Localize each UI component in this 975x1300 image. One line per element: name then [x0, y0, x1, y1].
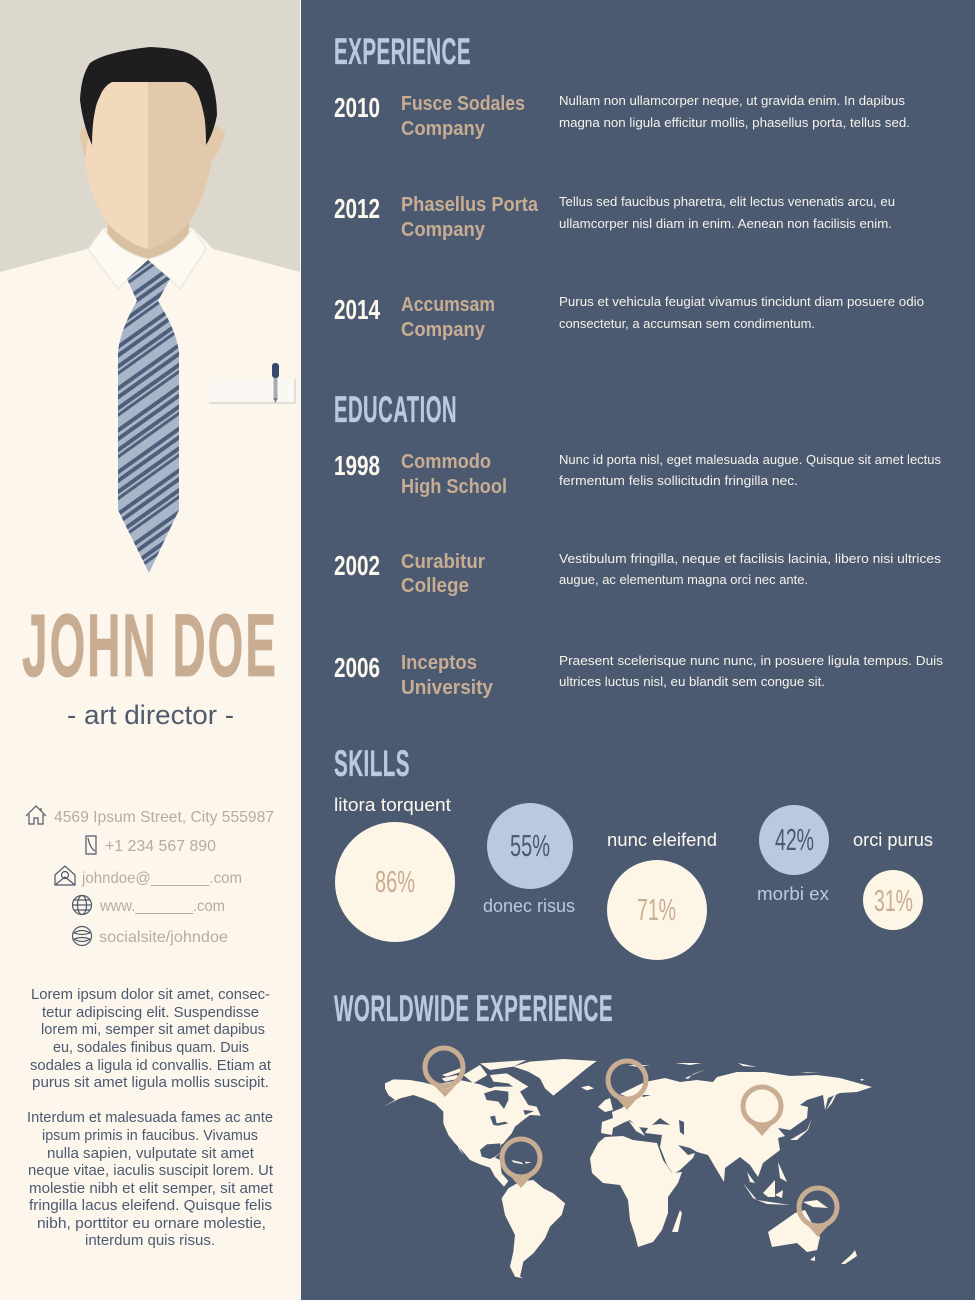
greenland: [513, 1059, 597, 1096]
americas and arctic: [383, 1059, 597, 1278]
panel: profile sidebar: [0, 0, 301, 1300]
ears: [80, 125, 225, 165]
northern islands: [628, 1063, 864, 1081]
skill: nunc eleifend 71%: nunc eleifend: [607, 830, 717, 850]
north america: [383, 1079, 541, 1187]
caribbean islands: [512, 1160, 532, 1164]
skill: morbi ex 42%: [757, 805, 829, 904]
icon: social: [72, 926, 92, 946]
experience entry 2014: [334, 294, 924, 341]
website: www._______.com: [99, 898, 225, 915]
new zealand and tasmania: [810, 1250, 857, 1264]
eurasia: [601, 1072, 872, 1182]
education entry 2002: Vestibulum fringilla, neque et facilisis lacinia, libero nisi ultrices: [559, 551, 942, 566]
experience entry 2010: [334, 92, 910, 140]
pin: caribbean: [502, 1139, 540, 1188]
job title: - art director -: [67, 700, 234, 730]
pin: australia: [799, 1188, 837, 1237]
heading: education: EDUCATION: [334, 389, 457, 430]
name: JOHN DOE: [22, 595, 278, 695]
education entry 2006: ultrices luctus nisl, eu blandit sem congue sit.: [559, 674, 825, 689]
panel: main content background: [301, 0, 975, 1300]
skill: donec risus 55%: 55%: [510, 828, 550, 863]
education entry 2002: augue, ac elementum magna orci nec ante.: [559, 572, 808, 587]
skill: orci purus 31%: orci purus: [853, 830, 933, 850]
bio paragraph two: nibh, porttitor eu ornare molestie,: [37, 1216, 266, 1232]
skill: orci purus 31%: [853, 830, 933, 930]
education entry 2002: College: [401, 575, 469, 597]
experience entry 2012: 2012: [334, 193, 380, 224]
italy: [628, 1120, 645, 1136]
pin: asia: [743, 1087, 781, 1136]
heading: worldwide experience: WORLDWIDE EXPERIENCE: [334, 988, 613, 1029]
experience entry 2012: Company: [401, 219, 486, 241]
education entry 2006: [334, 652, 944, 699]
face right half: [148, 78, 212, 249]
education entry 1998: High School: [401, 476, 507, 498]
bio paragraph one: tetur adipiscing elit. Suspendisse: [42, 1005, 259, 1021]
skill: litora torquent 86%: [334, 795, 455, 942]
black sea and caspian: [652, 1118, 684, 1135]
phone number: +1 234 567 890: [105, 838, 216, 855]
portrait backdrop: [0, 0, 300, 280]
skill: morbi ex 42%: 42%: [775, 822, 814, 857]
icon: envelope: [55, 866, 75, 885]
experience entry 2012: [334, 193, 895, 241]
education entry 1998: [334, 450, 941, 498]
social handle: socialsite/johndoe: [99, 929, 228, 946]
education entry 2006: Praesent scelerisque nunc nunc, in posuere ligula tempus. Duis: [559, 653, 944, 668]
experience entry 2012: Phasellus Porta: [401, 194, 539, 216]
skill: orci purus 31%: 31%: [874, 883, 913, 918]
experience entry 2010: Nullam non ullamcorper neque, ut gravida enim. In dapibus: [559, 93, 905, 108]
japan and sakhalin: [790, 1093, 837, 1140]
bio paragraph two: fringilla lacus eleifend. Quisque felis: [29, 1198, 272, 1214]
arctic islands: [442, 1060, 528, 1092]
email: johndoe@_______.com: [81, 870, 242, 887]
shirt: [0, 228, 300, 300]
experience entry 2012: Tellus sed faucibus pharetra, elit lectus venenatis arcu, eu: [559, 194, 895, 209]
map pins: [425, 1048, 837, 1237]
madagascar: [672, 1210, 682, 1232]
experience entry 2014: consectetur, a accumsan sem condimentum.: [559, 316, 815, 331]
education entry 2006: 2006: [334, 652, 380, 683]
africa: [590, 1136, 682, 1247]
iceland: [581, 1086, 594, 1090]
bio paragraph one: sodales a ligula id convallis. Etiam at: [30, 1058, 271, 1074]
uk and ireland: [598, 1098, 613, 1112]
face left half: [85, 78, 148, 249]
skill: donec risus 55%: [483, 803, 575, 916]
skill: nunc eleifend 71%: [607, 830, 717, 960]
icon: phone: [86, 836, 96, 854]
bio paragraph one: eu, sodales finibus quam. Duis: [53, 1040, 249, 1056]
bio paragraph two: Interdum et malesuada fames ac ante: [27, 1110, 273, 1126]
pin: north america: [425, 1048, 463, 1097]
experience entry 2010: magna non ligula efficitur mollis, phasellus porta, tellus sed.: [559, 115, 910, 130]
hair: [80, 47, 217, 145]
south america: [502, 1180, 565, 1278]
icon: man portrait: [80, 47, 295, 580]
education entry 1998: fermentum felis sollicitudin fringilla nec.: [559, 473, 798, 488]
eurasia, africa and oceania: [590, 1063, 872, 1264]
education entry 2006: Inceptos: [401, 652, 477, 674]
experience entry 2014: Accumsam: [401, 294, 495, 316]
skill: donec risus 55%: donec risus: [483, 896, 575, 916]
experience entry 2010: 2010: [334, 92, 380, 123]
bio paragraph two: neque vitae, iaculis suscipit lorem. Ut: [28, 1163, 273, 1179]
world map: [383, 1048, 872, 1278]
shirt pocket: [209, 379, 295, 403]
experience entry 2014: Company: [401, 319, 486, 341]
tie: [118, 260, 179, 573]
bio paragraph one: lorem mi, semper sit amet dapibus: [41, 1022, 265, 1038]
icon: house: [26, 806, 46, 824]
scandinavia: [620, 1078, 680, 1105]
bio paragraph two: interdum quis risus.: [85, 1233, 215, 1249]
experience entry 2014: 2014: [334, 294, 380, 325]
skill: litora torquent 86%: 86%: [375, 864, 415, 899]
hudson bay, gulf of mexico, great lakes: [480, 1090, 534, 1159]
bio paragraph two: [27, 1110, 273, 1249]
collar: [88, 228, 206, 289]
education entry 1998: Nunc id porta nisl, eget malesuada augue. Quisque sit amet lectus: [559, 452, 941, 467]
education entry 2002: Curabitur: [401, 551, 485, 573]
education entry 2002: 2002: [334, 550, 380, 581]
bio paragraph two: molestie nibh et elit semper, sit amet: [29, 1181, 273, 1197]
pin: europe: [608, 1061, 646, 1110]
australia: [768, 1210, 820, 1252]
education entry 1998: Commodo: [401, 451, 491, 473]
neck: [107, 222, 189, 259]
bio paragraph two: nulla sapien, vulputate sit amet: [47, 1146, 254, 1162]
contact list: [26, 806, 274, 946]
experience entry 2010: Fusce Sodales: [401, 93, 525, 115]
southeast asia islands: [743, 1162, 828, 1208]
bio paragraph two: ipsum primis in faucibus. Vivamus: [42, 1128, 258, 1144]
bio paragraph one: [30, 987, 271, 1091]
address: 4569 Ipsum Street, City 555987: [54, 809, 274, 826]
education entry 2006: University: [401, 677, 494, 699]
heading: skills: SKILLS: [334, 743, 410, 784]
education entry 1998: 1998: [334, 450, 380, 481]
experience entry 2010: Company: [401, 118, 486, 140]
education entry 2002: [334, 550, 942, 597]
bio paragraph one: purus sit amet ligula mollis suscipit.: [32, 1075, 269, 1091]
bio paragraph one: Lorem ipsum dolor sit amet, consec-: [31, 987, 270, 1003]
skill: litora torquent 86%: litora torquent: [334, 795, 451, 815]
baja: [456, 1142, 464, 1156]
icon: globe: [72, 896, 92, 914]
heading: experience: EXPERIENCE: [334, 31, 471, 72]
skill: morbi ex 42%: morbi ex: [757, 884, 829, 904]
experience entry 2012: ullamcorper nisl diam in enim. Aenean non facilisis enim.: [559, 216, 892, 231]
experience entry 2014: Purus et vehicula feugiat vivamus tincidunt diam posuere odio: [559, 294, 924, 309]
pen: [272, 363, 279, 403]
skill: nunc eleifend 71%: 71%: [637, 892, 676, 927]
